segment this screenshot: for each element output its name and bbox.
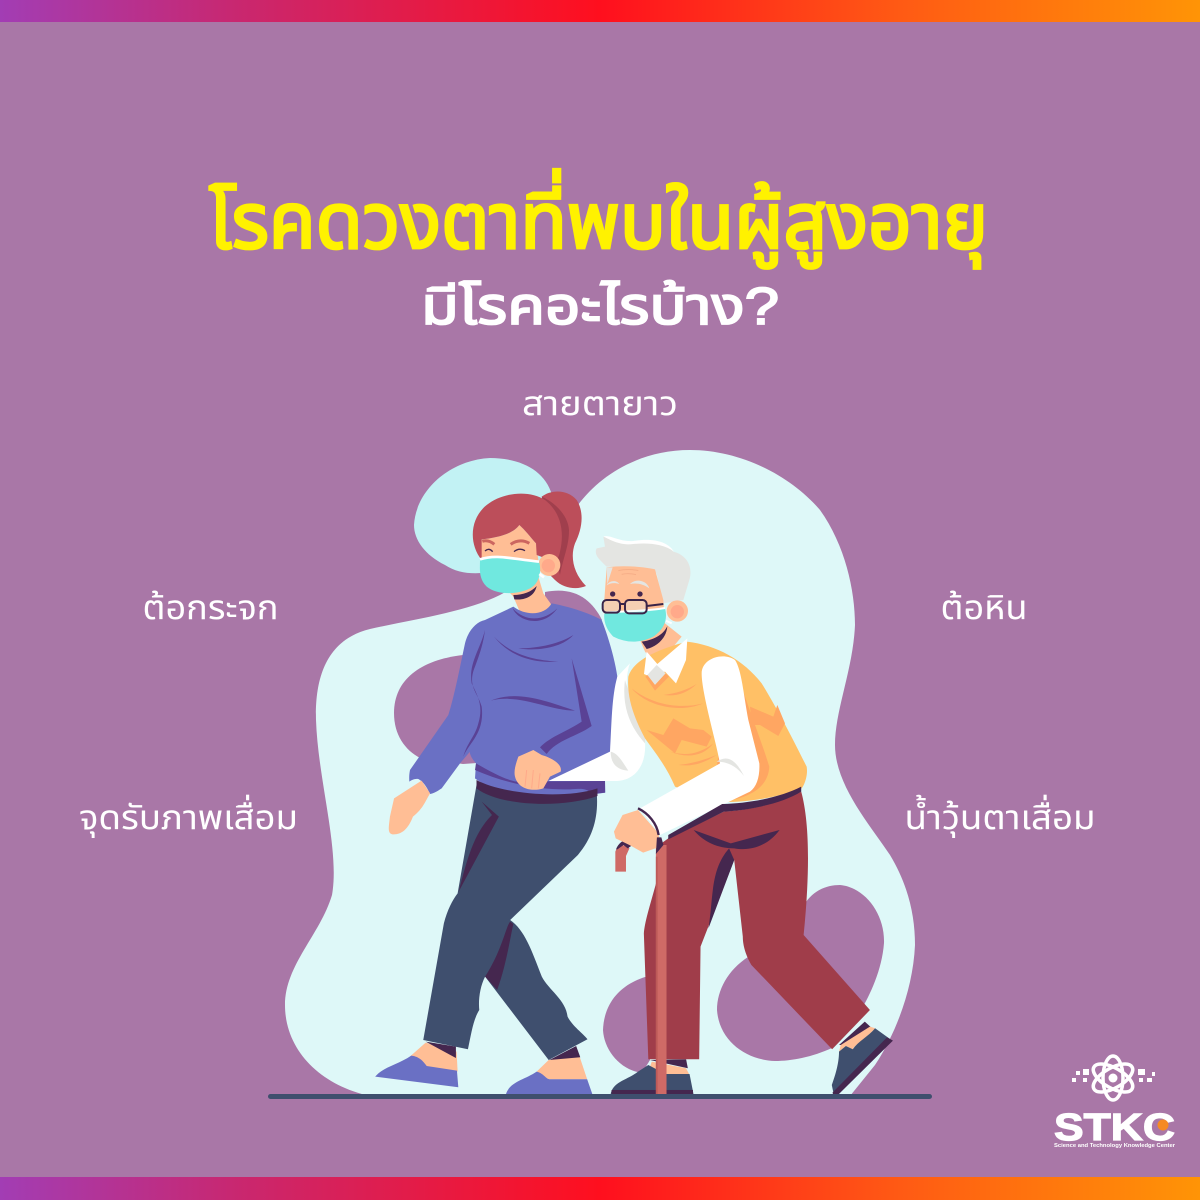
- man hair: [596, 536, 690, 603]
- woman ponytail: [542, 491, 586, 588]
- ground line: [268, 1094, 932, 1099]
- bottom gradient bar: [0, 1177, 1200, 1200]
- man glasses: [603, 600, 663, 613]
- label: vitreous degeneration: น้ำวุ้นตาเสื่อม: [904, 794, 1096, 838]
- label: farsightedness: สายตายาว: [522, 385, 678, 423]
- woman and man upper bodies: [409, 491, 807, 835]
- blob hole lower left: [603, 977, 650, 1073]
- label: glaucoma: ต้อหิน: [940, 589, 1028, 627]
- vest zigzag pattern: [632, 670, 785, 802]
- background blob: small: [414, 458, 560, 573]
- illustration: elderly couple walking: [268, 450, 932, 1099]
- logo atom icon: [1089, 1056, 1137, 1100]
- man vest: [628, 642, 807, 802]
- man collar: [644, 638, 687, 683]
- woman hand on arm: [515, 750, 561, 790]
- woman sweater: [409, 603, 617, 799]
- woman hand left: [389, 781, 430, 834]
- woman pants: [423, 785, 597, 1060]
- sweater folds: [463, 608, 592, 757]
- man forehead wrinkles: [618, 569, 638, 575]
- logo tagline: Science and Technology Knowledge Center: [1054, 1143, 1176, 1149]
- man front sleeve: [640, 656, 759, 835]
- man neck and face: [603, 566, 682, 667]
- blob holes: [394, 655, 520, 764]
- man ear: [667, 600, 688, 622]
- man hand: [614, 810, 660, 853]
- man rear shoe: [650, 1062, 690, 1075]
- man pants: [644, 792, 870, 1059]
- background blob: large: [285, 450, 915, 1096]
- logo: STKC: [1054, 1056, 1176, 1149]
- lower bodies: [375, 780, 893, 1098]
- logo squares: [1072, 1069, 1155, 1082]
- man eyes: [610, 591, 615, 597]
- man brows: [607, 581, 649, 588]
- label: cataract: ต้อกระจก: [142, 589, 278, 627]
- woman ear: [538, 554, 560, 576]
- woman hair: [473, 494, 562, 561]
- woman front foot: [537, 1057, 587, 1079]
- top gradient bar: [0, 0, 1200, 22]
- label: macular degeneration: จุดรับภาพเสื่อม: [79, 794, 298, 838]
- woman rear foot: [411, 1043, 458, 1072]
- subtitle: มีโรคอะไรบ้าง?: [421, 278, 779, 336]
- man front foot: [839, 1022, 871, 1045]
- woman mask: [480, 557, 540, 593]
- logo wordmark: STKC: [1054, 1107, 1175, 1149]
- woman brows and eyes: [482, 541, 529, 544]
- man mask: [604, 608, 666, 642]
- logo dot: [1158, 1120, 1168, 1130]
- title: โรคดวงตาที่พบในผู้สูงอายุ: [209, 169, 988, 269]
- man back arm: [548, 663, 645, 781]
- blob hole lower right: [717, 885, 884, 1061]
- man cane: [656, 845, 667, 1095]
- woman neck and face: [480, 525, 552, 617]
- man neck shadow: [642, 626, 667, 649]
